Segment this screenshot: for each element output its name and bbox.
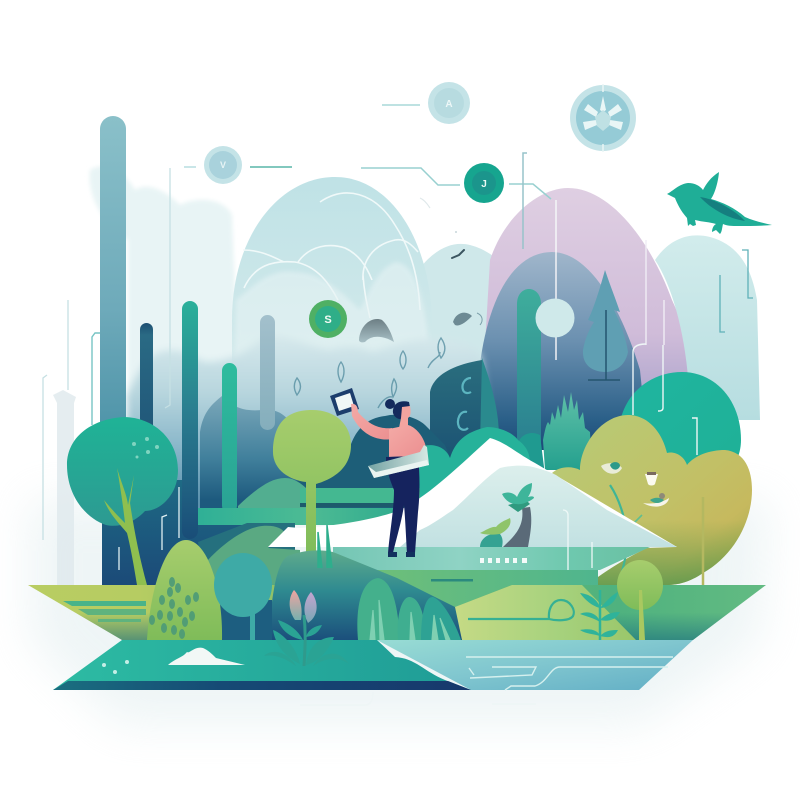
right big teal tree	[618, 372, 741, 490]
dark teal slope	[198, 523, 295, 585]
olive tree crown	[552, 415, 752, 585]
connector: lines beside V	[184, 166, 196, 168]
green mound left of hill	[208, 526, 300, 590]
green slope from hill	[367, 570, 598, 607]
circle icon: A: A	[445, 99, 453, 110]
blue hill with tree	[477, 252, 648, 450]
navy backdrop left	[102, 480, 255, 585]
small floating leaves	[294, 198, 482, 408]
pale teal ground strip	[333, 547, 650, 570]
icon: pine tree	[583, 270, 628, 372]
bar: tall left	[100, 116, 126, 436]
teal grass bushes	[357, 578, 461, 640]
tablet	[330, 388, 359, 416]
small lime tree	[617, 560, 663, 640]
circle icon: A	[428, 82, 470, 124]
bird wing	[700, 197, 745, 221]
navy front strip	[53, 681, 471, 690]
connector: line to J	[361, 168, 460, 185]
navy backdrop behind plants	[215, 600, 272, 640]
middle lime tree	[273, 410, 351, 555]
torso	[389, 425, 426, 457]
left mist cloud	[90, 166, 240, 420]
central mist gradient	[127, 336, 500, 515]
teal outline beside tall bar	[92, 333, 100, 425]
olive stripes on platform	[63, 601, 146, 622]
person	[330, 388, 429, 557]
circle icon: S	[309, 300, 347, 338]
thin connector lines at ground	[563, 510, 592, 592]
bush leaves	[149, 577, 199, 639]
dots	[102, 663, 106, 667]
white vertical connector	[555, 200, 557, 360]
thin left outlines	[43, 168, 170, 540]
connector: from J to right	[509, 184, 551, 199]
water platform	[377, 640, 693, 690]
trousers	[386, 456, 420, 553]
faint pillar	[53, 390, 76, 585]
left tree	[67, 417, 178, 585]
rolled panel	[368, 445, 429, 478]
white hook lines	[633, 344, 697, 455]
dark rock with C marks	[430, 358, 505, 470]
white rocks	[168, 648, 245, 665]
head hair	[393, 401, 410, 419]
hair bun	[385, 399, 395, 409]
green bands	[198, 488, 420, 525]
faint lines below platform	[300, 692, 536, 705]
lower teal platform	[53, 640, 471, 690]
right pale hill	[655, 235, 760, 420]
white hill	[268, 438, 677, 547]
pale circle	[536, 298, 574, 338]
dark teal hill behind person	[240, 415, 470, 510]
grass tufts at tree base	[318, 525, 332, 568]
teal round tree	[214, 553, 272, 640]
face	[399, 406, 411, 428]
white lines on navy	[119, 487, 179, 570]
dark green hill	[268, 550, 470, 640]
bar: grey blue	[260, 315, 275, 430]
flower plant	[264, 590, 349, 666]
lime bush with plant	[147, 540, 222, 640]
connector: vertical	[523, 153, 527, 249]
raised arm	[351, 404, 394, 440]
spiky grass bush	[543, 392, 592, 470]
inner pale hill	[400, 466, 677, 547]
circle icon: J	[464, 163, 504, 203]
lime trapezoid field	[455, 585, 636, 640]
teal hills right of person	[410, 427, 530, 520]
shoes	[388, 552, 415, 557]
small fern	[580, 590, 620, 640]
upper platform	[28, 585, 766, 640]
rolled panel edge	[368, 460, 429, 478]
small teal bump	[517, 433, 545, 475]
connector: line to A	[382, 104, 420, 106]
bowl icons on crown	[601, 462, 669, 507]
dark bar on slope	[431, 579, 473, 582]
small bonsai tree on hill	[480, 483, 534, 563]
purple hill	[480, 188, 704, 430]
bar: right teal	[517, 289, 541, 445]
circle icon: S: S	[324, 314, 332, 326]
green small mound	[238, 478, 308, 508]
pale mist hill behind	[400, 244, 520, 430]
circle icon: asterisk dial	[570, 84, 636, 152]
bar: short teal	[222, 363, 237, 513]
bar: teal	[182, 301, 198, 539]
back dark hill	[200, 396, 310, 510]
circle icon: J: J	[481, 179, 487, 190]
pine tree trunk	[588, 310, 620, 380]
circle icon: V	[204, 146, 242, 184]
circle icon: V: V	[220, 160, 226, 170]
pale cloud inside dome	[234, 262, 428, 420]
bar: dark	[140, 323, 153, 443]
tree trunks right	[610, 485, 703, 585]
misty ground glow	[30, 500, 770, 725]
bird	[667, 172, 772, 234]
big pale dome	[232, 177, 432, 430]
